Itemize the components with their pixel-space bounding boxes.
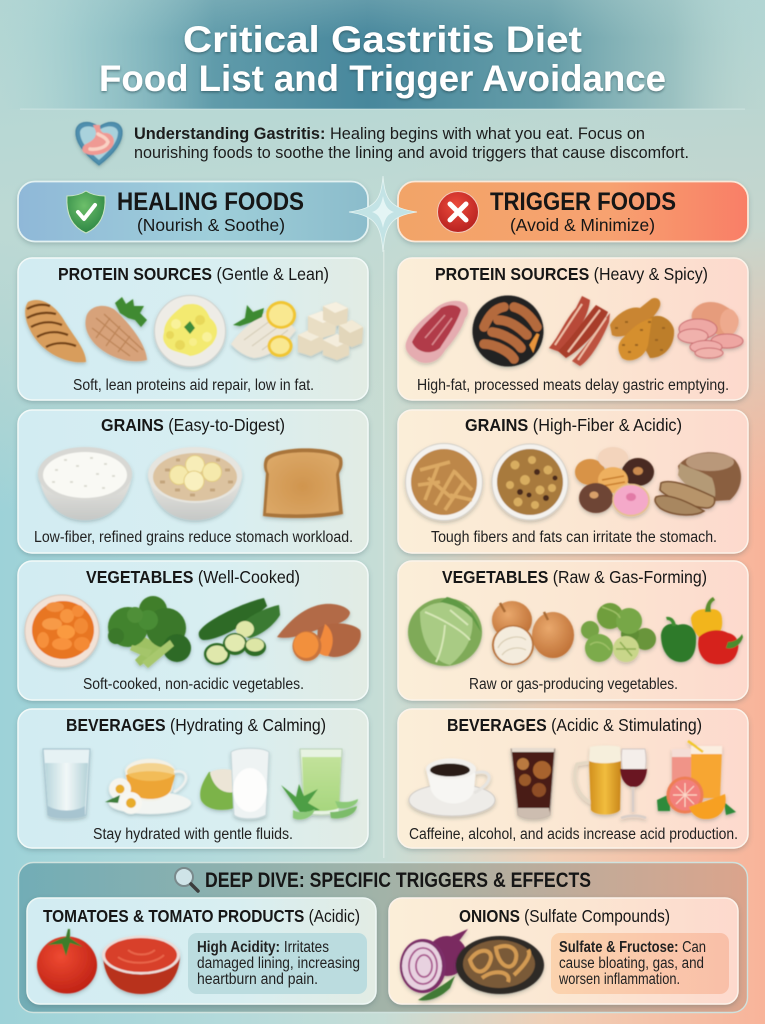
food: tomato sauce bowl bbox=[102, 936, 180, 994]
banner: healing foods bbox=[18, 182, 368, 242]
note: sulfate and fructose: Sulfate & Fructose: Can bbox=[559, 939, 706, 956]
food: coconut water bbox=[200, 748, 269, 819]
panel: healing grains bbox=[18, 410, 368, 553]
panel: healing vegetables bbox=[18, 561, 368, 700]
title bbox=[99, 18, 666, 99]
banner: trigger foods bbox=[398, 182, 748, 242]
caption: Soft, lean proteins aid repair, low in fat. bbox=[73, 377, 314, 394]
food: cooked carrots bbox=[25, 595, 99, 667]
note: sulfate and fructose bbox=[551, 933, 729, 994]
title: Critical Gastritis Diet bbox=[183, 18, 583, 60]
food: whole grain bread loaf bbox=[655, 452, 741, 515]
heading: VEGETABLES (Well-Cooked) bbox=[86, 567, 300, 587]
banner: healing foods: HEALING FOODS bbox=[117, 188, 304, 216]
food: broccoli bbox=[108, 596, 191, 668]
caption: Soft-cooked, non-acidic vegetables. bbox=[83, 676, 304, 693]
header band bbox=[0, 0, 765, 110]
heading: VEGETABLES (Raw & Gas-Forming) bbox=[442, 567, 707, 587]
food: tomato bbox=[37, 929, 97, 994]
panel: healing beverages bbox=[18, 709, 368, 848]
food: bacon bbox=[549, 296, 610, 366]
note: high acidity bbox=[188, 933, 367, 994]
panel: tomatoes bbox=[27, 898, 376, 1004]
panel: trigger grains bbox=[398, 410, 748, 553]
food: granola bowl bbox=[492, 444, 568, 520]
panel: trigger protein sources bbox=[398, 258, 748, 400]
food: red onion bbox=[400, 929, 468, 1000]
food: sweet potato bbox=[277, 604, 361, 661]
food: bell peppers bbox=[661, 597, 743, 664]
food: fried onions bowl bbox=[456, 936, 544, 994]
panel: deep dive bbox=[18, 862, 748, 1012]
food: yellow onions bbox=[492, 601, 574, 665]
heading: BEVERAGES (Hydrating & Calming) bbox=[66, 715, 326, 735]
food: grilled chicken bbox=[25, 300, 86, 362]
food: grilled chicken with parsley bbox=[85, 297, 147, 361]
food: ham slices bbox=[678, 302, 743, 358]
heading: BEVERAGES (Acidic & Stimulating) bbox=[447, 715, 702, 735]
heading: DEEP DIVE: SPECIFIC TRIGGERS & EFFECTS bbox=[205, 869, 591, 892]
intro: understanding gastritis: nourishing foods to soothe the lining and avoid triggers that cause discomfort. bbox=[134, 144, 689, 162]
caption: Low-fiber, refined grains reduce stomach workload. bbox=[34, 529, 353, 546]
food: coffee cup bbox=[409, 758, 495, 816]
food: chamomile tea bbox=[105, 759, 191, 814]
banner: healing foods: (Nourish & Soothe) bbox=[137, 215, 285, 235]
intro: understanding gastritis: Understanding Gastritis: Healing begins with what you eat. Focus on bbox=[134, 125, 645, 143]
food: raw steak bbox=[406, 301, 468, 363]
food: oatmeal with banana bbox=[148, 447, 242, 520]
food: bowl of white rice bbox=[38, 447, 132, 520]
heading: ONIONS (Sulfate Compounds) bbox=[459, 906, 670, 926]
panel: trigger beverages bbox=[398, 709, 748, 848]
food: glass of water bbox=[43, 749, 90, 818]
food: tofu cubes bbox=[298, 302, 363, 360]
heading: TOMATOES & TOMATO PRODUCTS (Acidic) bbox=[43, 906, 360, 926]
food: cabbage bbox=[408, 597, 482, 666]
food: toast bbox=[263, 448, 343, 518]
caption: Stay hydrated with gentle fluids. bbox=[93, 826, 293, 843]
heading: GRAINS (Easy-to-Digest) bbox=[101, 415, 285, 435]
heading: GRAINS (High-Fiber & Acidic) bbox=[465, 415, 682, 435]
panel: onions bbox=[389, 898, 738, 1004]
food: brussels sprouts bbox=[581, 603, 656, 662]
food: whole wheat pasta bbox=[406, 444, 482, 520]
food: zucchini bbox=[199, 598, 280, 665]
icon: red circle with X bbox=[438, 192, 478, 232]
caption: Tough fibers and fats can irritate the stomach. bbox=[431, 529, 717, 546]
banner: trigger foods: TRIGGER FOODS bbox=[490, 188, 676, 216]
icon: heart with stomach bbox=[76, 122, 122, 165]
food: sausages on black plate bbox=[472, 296, 544, 366]
intro: understanding gastritis bbox=[76, 122, 689, 165]
title: Food List and Trigger Avoidance bbox=[99, 57, 666, 99]
caption: Raw or gas-producing vegetables. bbox=[469, 676, 678, 693]
panel: trigger vegetables bbox=[398, 561, 748, 700]
icon: green shield with check bbox=[67, 191, 105, 233]
food: scrambled eggs on plate bbox=[154, 296, 226, 366]
icon: magnifying glass bbox=[175, 868, 198, 891]
note: high acidity: damaged lining, increasing bbox=[197, 955, 360, 972]
note: high acidity: heartburn and pain. bbox=[197, 971, 318, 988]
caption: High-fat, processed meats delay gastric emptying. bbox=[417, 377, 729, 394]
banner: trigger foods: (Avoid & Minimize) bbox=[510, 215, 655, 235]
heading: PROTEIN SOURCES (Gentle & Lean) bbox=[58, 264, 329, 284]
note: sulfate and fructose: worsen inflammation. bbox=[558, 971, 680, 988]
food: fried chicken bbox=[610, 298, 674, 360]
note: sulfate and fructose: cause bloating, gas, and bbox=[559, 955, 704, 972]
food: white fish with lemon bbox=[231, 301, 296, 358]
note: high acidity: High Acidity: Irritates bbox=[197, 939, 329, 956]
food: aloe juice bbox=[281, 749, 358, 820]
food: donuts and pastries bbox=[575, 447, 654, 516]
panel: healing protein sources bbox=[18, 258, 368, 400]
food: citrus juices and fruit bbox=[657, 741, 736, 819]
food: cola with ice bbox=[511, 748, 555, 819]
heading: PROTEIN SOURCES (Heavy & Spicy) bbox=[435, 264, 708, 284]
food: beer and red wine bbox=[575, 746, 647, 818]
center star divider bbox=[349, 176, 417, 252]
caption: Caffeine, alcohol, and acids increase acid production. bbox=[409, 826, 738, 843]
